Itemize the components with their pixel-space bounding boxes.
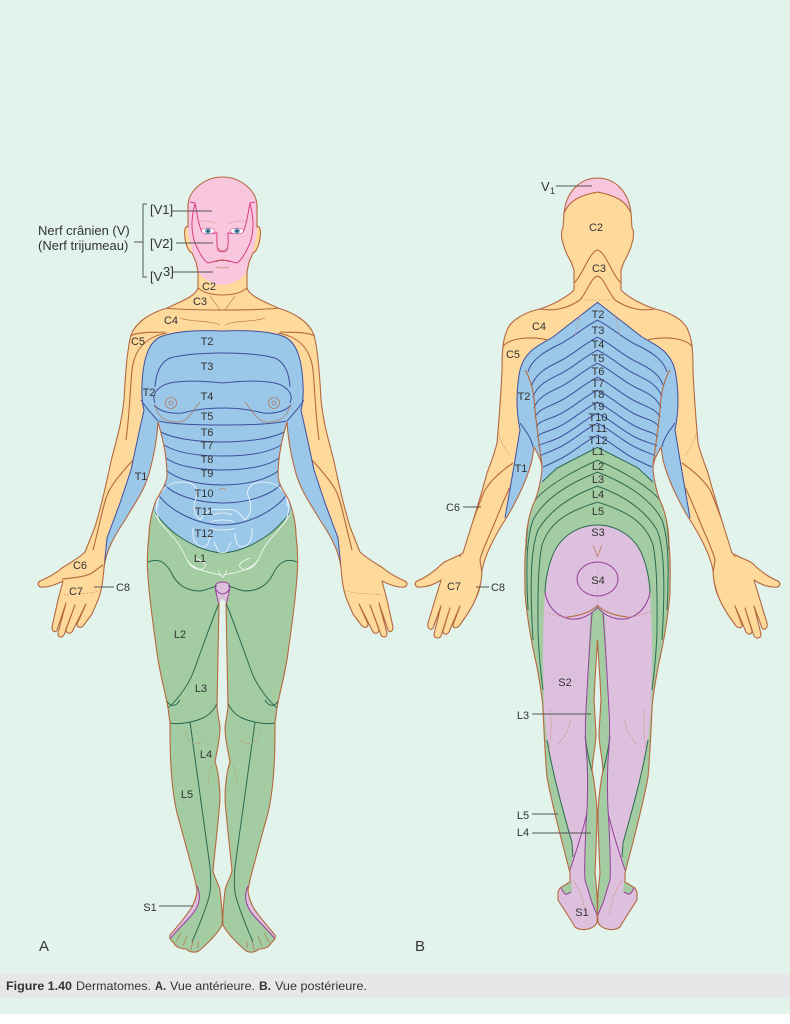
labels: anterior dermatomes: T2 xyxy=(201,336,213,348)
caption band: Figure 1.40 xyxy=(6,979,72,993)
labels: anterior dermatomes: T11 xyxy=(195,506,213,518)
labels: cranial nerve callout: (Nerf trijumeau) xyxy=(38,238,128,253)
labels: anterior dermatomes: L3 xyxy=(195,683,207,695)
orange cervical boundary lines xyxy=(64,288,223,595)
caption band: A. xyxy=(155,979,166,993)
labels: anterior dermatomes xyxy=(69,281,216,914)
labels: anterior dermatomes: C8 xyxy=(116,582,130,594)
labels: anterior dermatomes: C3 xyxy=(193,296,207,308)
labels: anterior dermatomes: C7 xyxy=(69,586,83,598)
labels: posterior dermatomes: L4 xyxy=(592,489,604,501)
labels: anterior dermatomes: L1 xyxy=(194,553,206,565)
labels: posterior dermatomes: L5 xyxy=(517,810,529,822)
labels: posterior dermatomes: L3 xyxy=(517,710,529,722)
right half of posterior body (mirror) xyxy=(576,170,785,960)
body outline xyxy=(38,177,222,952)
labels: posterior dermatomes: T1 xyxy=(515,463,527,475)
labels: anterior dermatomes: C4 xyxy=(164,315,178,327)
labels: anterior dermatomes: T12 xyxy=(195,528,213,540)
panel letter A: A xyxy=(39,938,49,955)
labels: anterior dermatomes: T7 xyxy=(201,440,213,452)
labels: posterior dermatomes: C7 xyxy=(447,581,461,593)
labels: anterior dermatomes: T1 xyxy=(135,471,147,483)
face lines xyxy=(190,202,223,268)
labels: posterior dermatomes: T10 xyxy=(589,412,607,424)
labels: posterior dermatomes: L5 xyxy=(592,506,604,518)
labels: anterior dermatomes: C2 xyxy=(202,281,216,293)
labels: posterior dermatomes: L1 xyxy=(592,446,604,458)
labels: cranial nerve callout: [V xyxy=(150,269,163,284)
labels: posterior dermatomes: L2 xyxy=(592,461,604,473)
labels: posterior dermatomes: T9 xyxy=(592,401,604,413)
left half of posterior body with dermatome regions xyxy=(410,170,619,960)
caption band xyxy=(0,974,790,998)
labels: posterior dermatomes: T5 xyxy=(592,353,604,365)
caption band: Vue postérieure. xyxy=(275,979,367,993)
labels: cranial nerve callout: [V2] xyxy=(150,236,173,251)
labels: anterior dermatomes: L5 xyxy=(181,789,193,801)
navel xyxy=(218,488,226,490)
figure A: anterior body view xyxy=(30,170,415,960)
buttock and leg purple lines xyxy=(540,545,619,917)
labels: posterior dermatomes: T2 xyxy=(592,309,604,321)
labels: cranial nerve callout xyxy=(38,202,213,284)
labels: anterior dermatomes: T10 xyxy=(195,488,213,500)
caption band: Dermatomes. xyxy=(76,979,151,993)
left half of anterior body with dermatome regions xyxy=(30,170,224,960)
cervical lines posterior xyxy=(460,192,598,607)
labels: anterior dermatomes: T2 xyxy=(143,387,155,399)
labels: anterior dermatomes: T6 xyxy=(201,427,213,439)
labels: cranial nerve callout: 3] xyxy=(163,264,174,279)
C6/C7 boundary on left hand xyxy=(62,565,103,579)
toe lines xyxy=(176,933,198,950)
thoracic lines posterior xyxy=(505,302,598,518)
labels: posterior dermatomes: T7 xyxy=(592,378,604,390)
labels: posterior dermatomes: C2 xyxy=(589,222,603,234)
labels: posterior dermatomes: S3 xyxy=(591,527,605,539)
skeleton pelvis overlay xyxy=(153,482,223,578)
labels: anterior dermatomes: T8 xyxy=(201,454,213,466)
labels: posterior dermatomes: T4 xyxy=(592,339,604,351)
labels: posterior dermatomes: C8 xyxy=(491,582,505,594)
labels: posterior dermatomes: T3 xyxy=(592,325,604,337)
labels: posterior dermatomes: S2 xyxy=(558,677,572,689)
labels: posterior dermatomes: T8 xyxy=(592,389,604,401)
labels: posterior dermatomes xyxy=(446,179,607,919)
panel letter B: B xyxy=(415,938,425,955)
labels: posterior dermatomes: L4 xyxy=(517,827,529,839)
labels: anterior dermatomes: C5 xyxy=(131,336,145,348)
blue thoracic boundary lines xyxy=(104,331,223,568)
labels: posterior dermatomes: 1 xyxy=(550,186,555,196)
labels: posterior dermatomes: S1 xyxy=(575,907,589,919)
labels: anterior dermatomes: T3 xyxy=(201,361,213,373)
caption band: Vue antérieure. xyxy=(170,979,255,993)
labels: anterior dermatomes: T9 xyxy=(201,468,213,480)
labels: anterior dermatomes: L4 xyxy=(200,749,212,761)
green lumbar boundary lines xyxy=(148,510,223,942)
labels: anterior dermatomes: T4 xyxy=(201,391,213,403)
labels: posterior dermatomes: T6 xyxy=(592,366,604,378)
labels: cranial nerve callout: [V1] xyxy=(150,202,173,217)
labels: posterior dermatomes: C6 xyxy=(446,502,460,514)
labels: anterior dermatomes: T5 xyxy=(201,411,213,423)
labels: posterior dermatomes: T11 xyxy=(589,423,607,435)
labels: posterior dermatomes: L3 xyxy=(592,474,604,486)
labels: anterior dermatomes: L2 xyxy=(174,629,186,641)
labels: posterior dermatomes: T2 xyxy=(518,391,530,403)
labels: posterior dermatomes: V xyxy=(541,179,550,194)
labels: posterior dermatomes: C5 xyxy=(506,349,520,361)
labels: cranial nerve callout: Nerf crânien (V) xyxy=(38,223,130,238)
breast and nipple xyxy=(155,398,200,422)
labels: posterior dermatomes: T12 xyxy=(589,435,607,447)
lumbar lines posterior xyxy=(526,447,598,857)
labels: posterior dermatomes: C3 xyxy=(592,263,606,275)
labels: anterior dermatomes: S1 xyxy=(143,902,157,914)
labels: anterior dermatomes: C6 xyxy=(73,560,87,572)
posterior body outline xyxy=(415,178,598,930)
right half of anterior body (mirror) xyxy=(221,170,415,960)
figure B: posterior body view xyxy=(410,170,785,960)
caption band: B. xyxy=(259,979,271,993)
labels: posterior dermatomes: C4 xyxy=(532,321,546,333)
labels: posterior dermatomes: S4 xyxy=(591,575,605,587)
